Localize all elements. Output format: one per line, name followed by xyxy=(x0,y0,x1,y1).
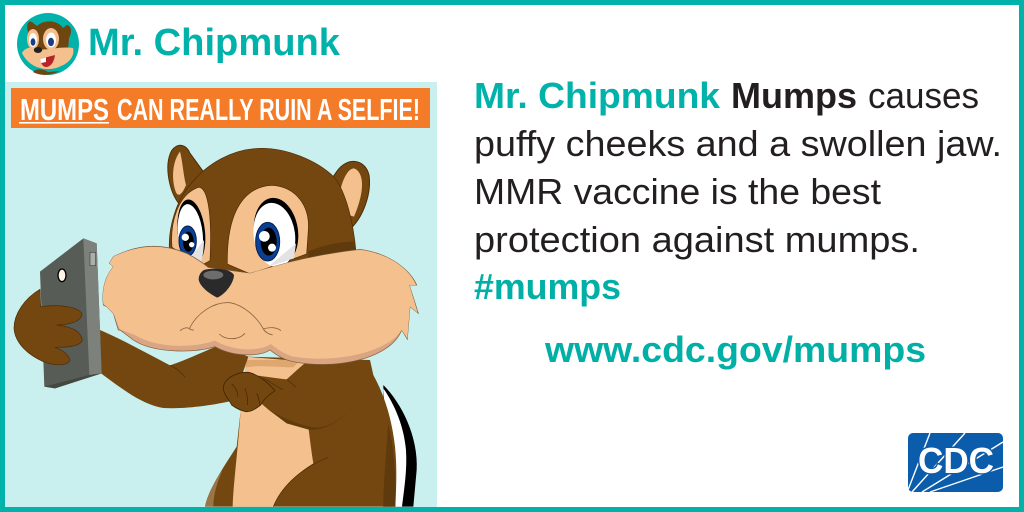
right eye xyxy=(249,195,303,270)
header title: Mr. Chipmunk xyxy=(88,22,341,64)
right ear xyxy=(322,161,369,231)
body xyxy=(205,357,396,507)
body copy: Mr. Chipmunk xyxy=(474,75,721,116)
left eye xyxy=(174,198,208,266)
website url: www.cdc.gov/mumps xyxy=(544,329,926,370)
CDC logo xyxy=(908,433,1003,492)
orange banner: CAN REALLY RUIN A SELFIE! xyxy=(117,92,420,127)
body copy: Mumps xyxy=(731,75,857,116)
body copy: puffy cheeks and a swollen jaw. xyxy=(474,123,1002,164)
tail stripes xyxy=(383,385,417,507)
body copy xyxy=(474,75,1002,307)
orange banner xyxy=(11,88,430,128)
folded arm xyxy=(240,363,373,427)
header avatar: chipmunk in circle xyxy=(17,13,79,75)
orange banner: MUMPS xyxy=(20,92,109,127)
phone xyxy=(40,238,102,388)
body copy: causes xyxy=(868,75,979,116)
body copy: MMR vaccine is the best xyxy=(474,171,881,212)
cheek shadow xyxy=(103,246,418,364)
paw xyxy=(223,372,275,412)
right eye mask xyxy=(227,185,308,274)
nose xyxy=(199,269,234,298)
cheeks xyxy=(103,247,418,359)
belly xyxy=(233,357,313,507)
chipmunk illustration xyxy=(14,145,418,507)
CDC logo: CDC xyxy=(918,440,994,481)
body copy: #mumps xyxy=(474,266,621,307)
raised arm xyxy=(100,330,248,408)
left eye mask xyxy=(172,187,211,266)
illustration panel xyxy=(5,82,437,507)
left ear xyxy=(168,145,203,205)
phone hand xyxy=(14,289,82,365)
mouth xyxy=(180,303,281,339)
body copy: protection against mumps. xyxy=(474,219,920,260)
head xyxy=(169,148,356,277)
